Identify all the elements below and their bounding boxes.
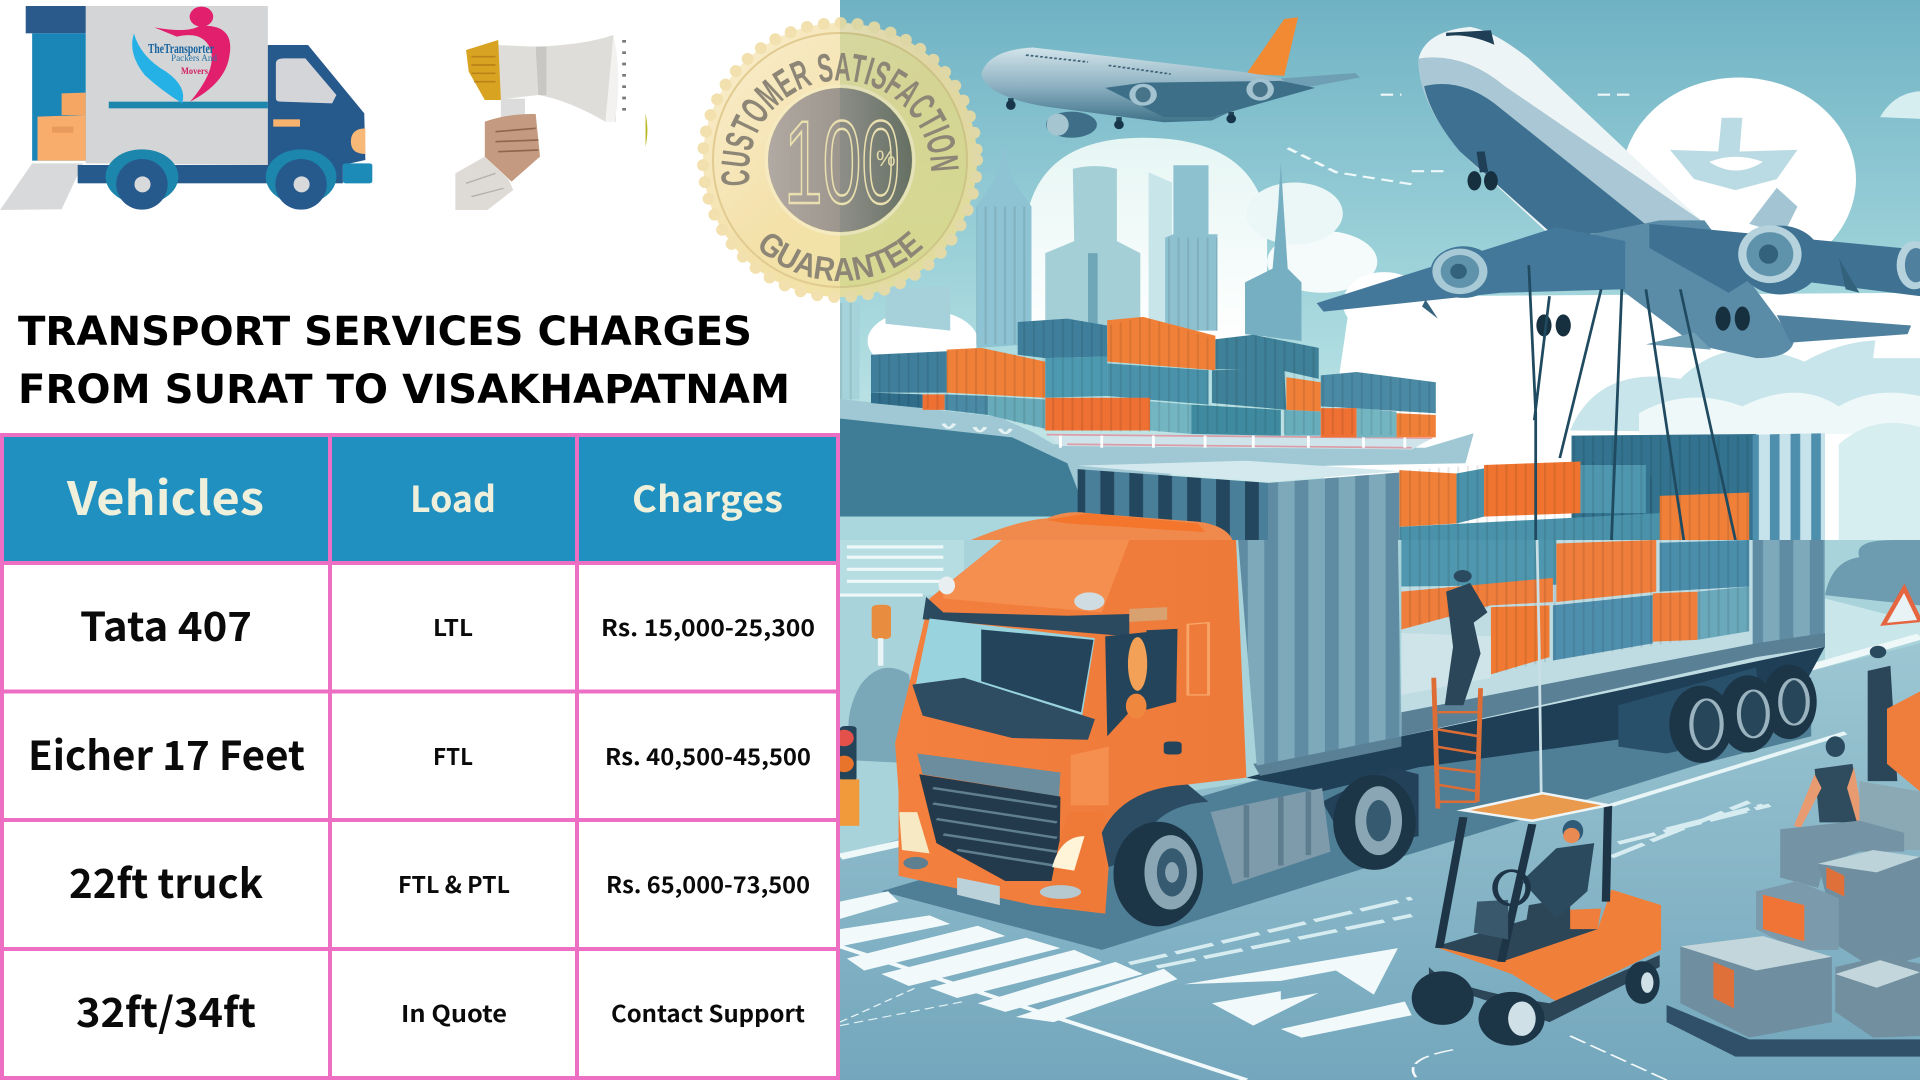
badge seal [703, 23, 977, 297]
row: 32ft/34ft: 32ft/34ft [76, 981, 256, 1039]
cargo ship hull [840, 399, 1474, 517]
row: Tata 407: Tata 407 [80, 595, 252, 653]
large airplane [1317, 27, 1920, 358]
logo text: TheTransporter [148, 42, 214, 57]
sky background [840, 0, 1920, 1080]
badge circular text [721, 53, 959, 282]
row: 32ft/34ft: In Quote [401, 995, 507, 1029]
badge circular text: GUARANTEE [760, 230, 924, 282]
badge: customer satisfaction guarantee [697, 17, 983, 303]
header: vehicles: Vehicles [66, 463, 264, 529]
city skyline [840, 145, 1301, 400]
row: 22ft truck: Rs. 65,000-73,500 [606, 866, 810, 900]
title [18, 309, 790, 413]
badge 100 percent: % [876, 146, 896, 171]
small airplane [981, 17, 1360, 138]
badge 100 percent [784, 97, 900, 229]
panel: left white column [0, 0, 840, 433]
truck shadow [881, 678, 1811, 950]
roadside bushes [848, 540, 1920, 764]
table cell background [2, 563, 838, 1077]
row: 22ft truck: FTL & PTL [398, 866, 510, 900]
lower half of the scene [834, 540, 1920, 1080]
row: Eicher 17 Feet: Rs. 40,500-45,500 [605, 738, 811, 772]
row: Tata 407 [80, 595, 815, 653]
title: TRANSPORT SERVICES CHARGES [18, 309, 752, 355]
row: 22ft truck [69, 852, 810, 910]
trailer box side [1238, 540, 1401, 766]
traffic signal [834, 605, 891, 826]
warning sign [1884, 588, 1920, 624]
row: Eicher 17 Feet [28, 724, 811, 782]
trailer side and deck [1253, 540, 1825, 776]
header: load: Load [410, 471, 496, 523]
worker on trailer [1445, 570, 1487, 705]
ladder [1434, 678, 1481, 809]
table grid [0, 435, 840, 1079]
table header band [2, 436, 838, 563]
crane cables [1529, 265, 1735, 540]
icon: moving truck with logo [0, 6, 372, 210]
illustration: logistics scene [834, 0, 1920, 1080]
plane emblem in sun disc [1670, 118, 1797, 190]
trailer chassis and wheels [1246, 647, 1825, 791]
orange truck cab [895, 540, 1246, 926]
road markings [840, 733, 1846, 1080]
header: charges: Charges [632, 471, 783, 523]
row: Eicher 17 Feet: Eicher 17 Feet [28, 724, 305, 782]
badge 100 percent: 100 [784, 97, 900, 229]
row: 32ft/34ft: Contact Support [611, 995, 805, 1029]
title: FROM SURAT TO VISAKHAPATNAM [18, 367, 790, 413]
row: Eicher 17 Feet: FTL [433, 738, 473, 772]
forklift hoist cable [1537, 540, 1541, 793]
logo text: Packers And [171, 53, 217, 63]
trailer box top [1078, 461, 1399, 540]
row: 32ft/34ft [76, 981, 805, 1039]
icon: hand with megaphone [455, 35, 647, 210]
fuel tank and rear cab wheel [1211, 767, 1419, 884]
road surface [840, 643, 1920, 1080]
contrails [1288, 95, 1632, 184]
stacked shipping containers [871, 317, 1436, 437]
logo text: Movers [181, 66, 208, 76]
rear containers [1399, 433, 1825, 540]
stacked cartons on pallet [1667, 781, 1920, 1057]
logo text [148, 42, 217, 76]
charges table [0, 435, 840, 1079]
ground backdrop [840, 540, 1920, 1080]
row: Tata 407: LTL [433, 609, 473, 643]
truck cab roof top [971, 512, 1233, 540]
forklift [1412, 793, 1661, 1046]
row: Tata 407: Rs. 15,000-25,300 [601, 609, 815, 643]
badge circular text: CUSTOMER SATISFACTION [721, 53, 959, 186]
row: 22ft truck: 22ft truck [69, 852, 263, 910]
water [840, 517, 1088, 540]
workers [1794, 646, 1920, 828]
clouds and sun discs [868, 77, 1920, 540]
upper half of the scene [840, 17, 1920, 540]
